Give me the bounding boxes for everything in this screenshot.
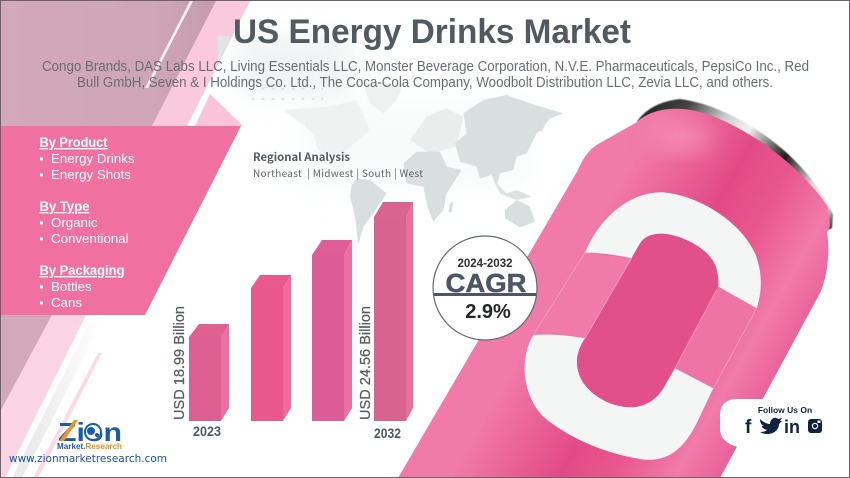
top-left decorative stripes	[1, 1, 250, 126]
logo: zion market research: Zion	[58, 417, 122, 447]
australia	[505, 200, 535, 227]
title: US Energy Drinks Market	[233, 13, 631, 51]
cagr badge	[433, 236, 537, 340]
logo thin lines	[533, 253, 757, 388]
bar 2023	[189, 324, 229, 421]
bar value labels: USD 24.56 Billion	[357, 306, 374, 420]
by type: Conventional	[51, 231, 129, 246]
by packaging: Bottles	[51, 279, 92, 294]
bar value labels: USD 18.99 Billion	[171, 306, 188, 420]
bar 2	[251, 275, 291, 421]
cagr badge: 2.9%	[465, 301, 511, 323]
icon: facebook: f	[745, 417, 752, 438]
icon: linkedin: in	[784, 417, 800, 437]
by packaging	[40, 263, 124, 310]
logo white C	[525, 192, 761, 460]
by product: Energy Drinks	[51, 151, 135, 166]
regional analysis: Regional Analysis	[253, 149, 351, 165]
can body	[398, 109, 830, 478]
by packaging: Cans	[51, 295, 82, 310]
icon: twitter	[760, 418, 782, 434]
dot pattern	[248, 85, 323, 105]
europe	[410, 108, 463, 153]
energy drink can	[398, 99, 833, 478]
africa	[403, 152, 462, 222]
logo: zion market research	[9, 417, 167, 465]
map background haze	[240, 35, 530, 190]
by product: Energy Shots	[51, 167, 131, 182]
logo band	[533, 253, 757, 388]
website url: www.zionmarketresearch.com	[9, 453, 167, 465]
subtitle: company list	[42, 59, 809, 91]
cagr badge: CAGR	[446, 268, 527, 298]
subtitle: company list: Bull GmbH, Seven & I Holdings Co. Ltd., The Coca-Cola Company, Woodbolt Distribution LLC, Zevia LLC, and others.	[77, 75, 773, 91]
logo center pill	[577, 234, 718, 407]
world map	[283, 83, 563, 245]
icon: globe	[84, 423, 102, 441]
bar 2032	[374, 202, 413, 421]
bar year labels: 2032	[374, 425, 401, 441]
by type: By Type	[40, 199, 90, 214]
social box: Follow Us On	[758, 405, 812, 415]
can rim	[637, 99, 833, 230]
by product	[40, 135, 135, 182]
madagascar	[448, 202, 453, 213]
bar chart	[189, 202, 413, 421]
social box	[720, 399, 849, 447]
bar 3	[312, 240, 352, 421]
icon: instagram	[808, 419, 822, 433]
cagr badge: 2024-2032	[458, 258, 512, 270]
bottom-left decorative stripes	[1, 315, 104, 478]
by type	[40, 199, 129, 246]
asia	[455, 95, 563, 187]
regional analysis: Northeast | Midwest | South | West	[253, 165, 423, 180]
greenland	[363, 83, 403, 113]
regional analysis	[253, 149, 423, 180]
can highlight	[650, 124, 714, 152]
south america	[350, 178, 387, 245]
north america	[283, 100, 370, 157]
bar year labels	[193, 423, 401, 441]
japan	[538, 120, 545, 132]
by product: By Product	[40, 135, 108, 150]
by packaging: By Packaging	[40, 263, 124, 278]
panel: segments	[1, 126, 241, 315]
south east asia islands	[493, 180, 532, 200]
by type: Organic	[51, 215, 98, 230]
logo: zion market research: Market.Research	[57, 442, 122, 451]
bar value labels	[171, 306, 374, 420]
bar year labels: 2023	[193, 423, 221, 439]
